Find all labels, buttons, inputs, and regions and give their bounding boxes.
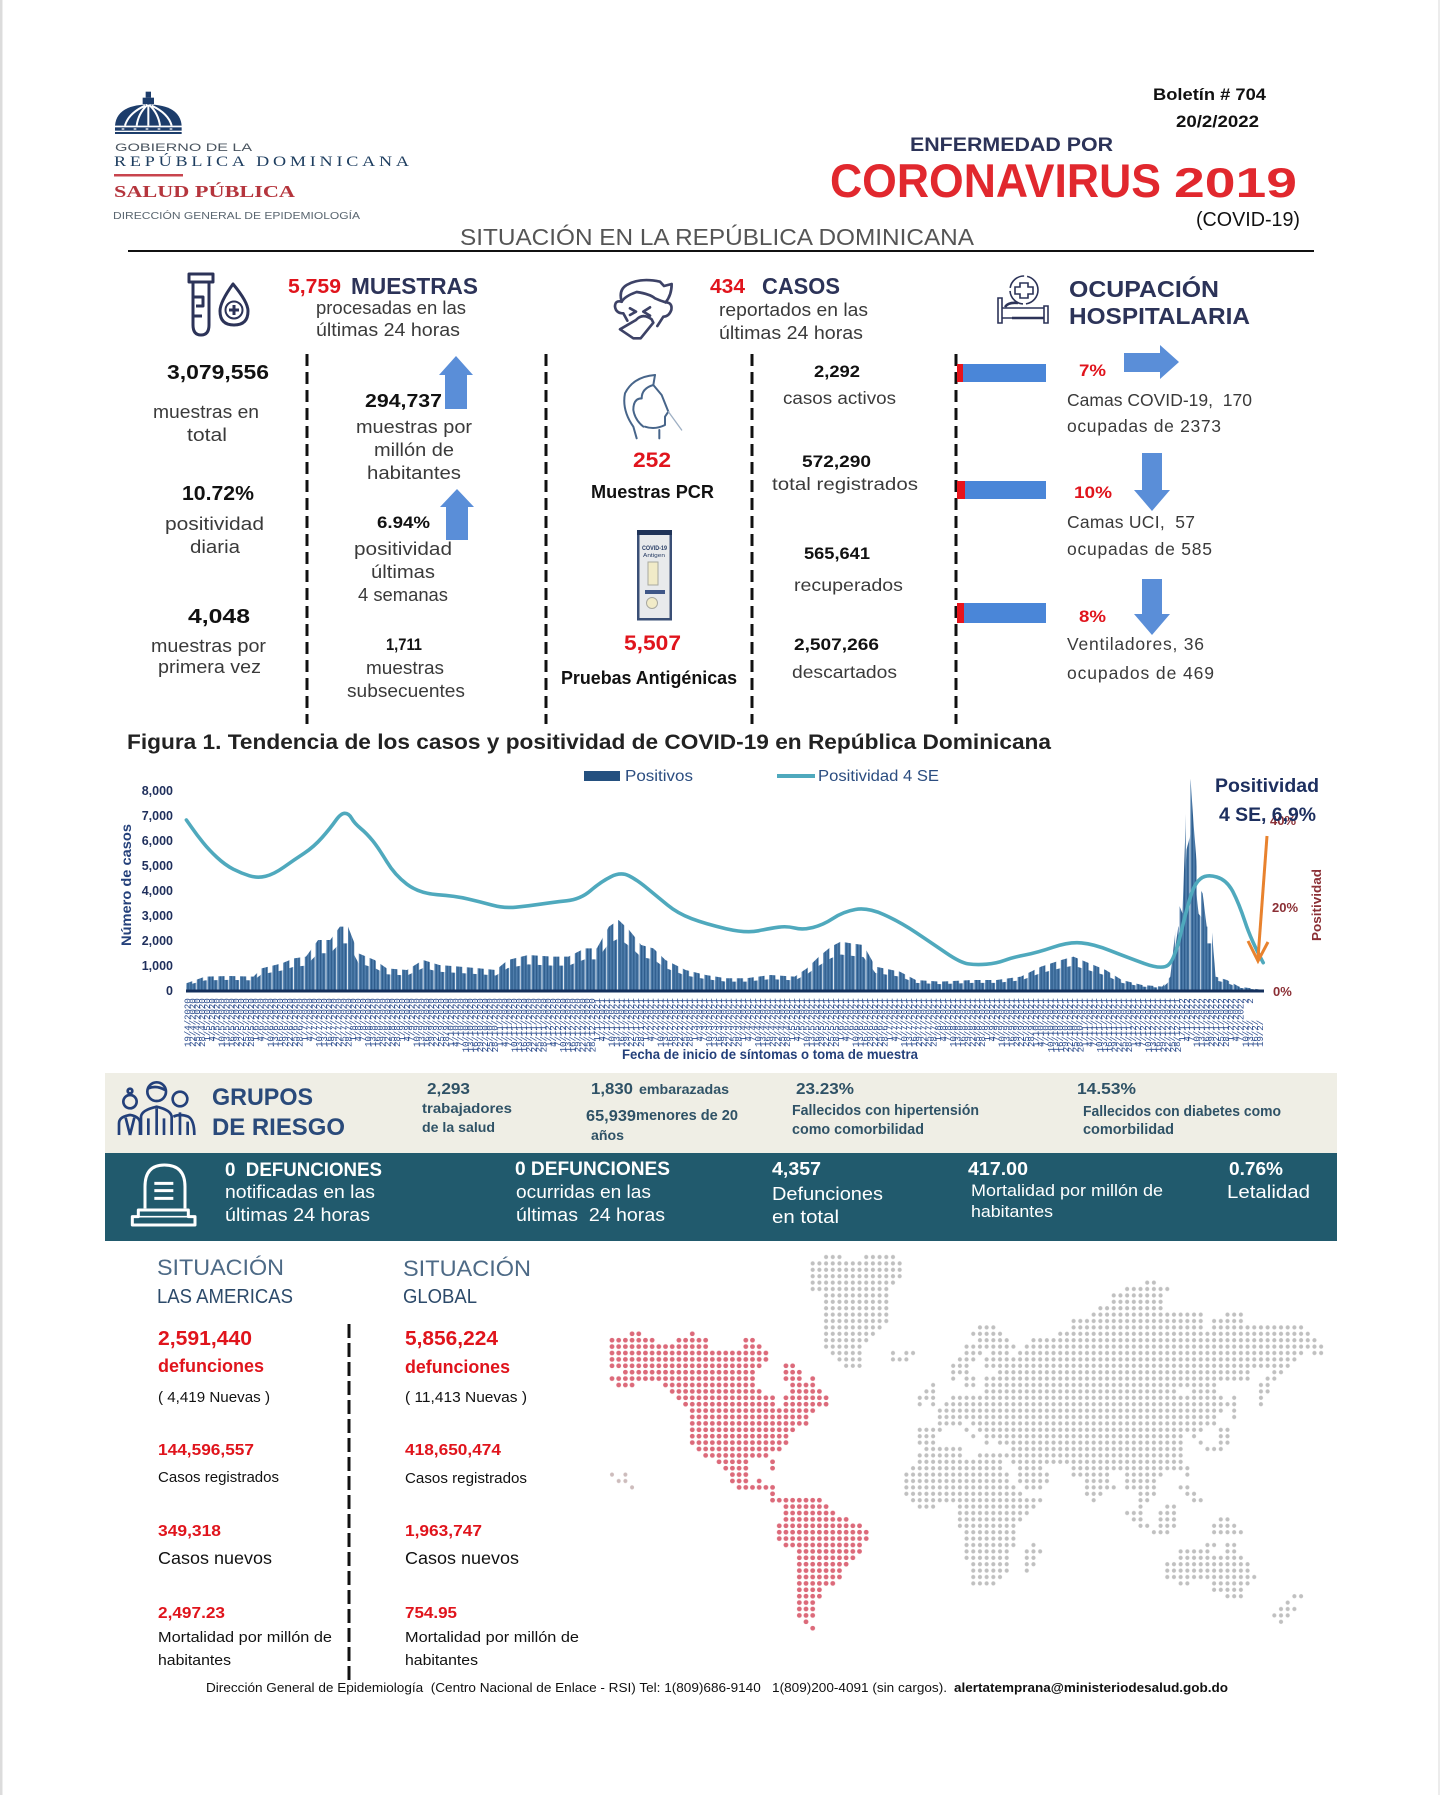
panel: situación global: habitantes: [405, 1652, 478, 1669]
panel: ocupación hospitalaria: 10%: [1074, 483, 1112, 502]
title: [830, 134, 1300, 231]
footer: contact information: alertatemprana@ministeriodesalud.gob.do: [954, 1681, 1228, 1695]
panel: pruebas PCR y antigénicas: 5,507: [624, 632, 681, 655]
panel: grupos de riesgo: años: [591, 1127, 624, 1143]
panel: ocupación hospitalaria header: HOSPITALARIA: [1069, 303, 1250, 329]
panel: situación Las Américas: [157, 1255, 332, 1669]
panel: situación global: SITUACIÓN: [403, 1256, 531, 1281]
panel: situación global: 418,650,474: [405, 1442, 501, 1459]
panel: situación Las Américas: Casos registrados: [158, 1470, 279, 1486]
panel: grupos de riesgo: 14.53%: [1077, 1081, 1136, 1098]
panel: situación Las Américas: 2,497.23: [158, 1605, 225, 1622]
panel: indicadores de muestras: 4 semanas: [358, 585, 448, 605]
panel: casos: 565,641: [804, 545, 870, 563]
heading: figura 1: Figura 1. Tendencia de los casos y positividad de COVID-19 en República Dominicana: [127, 731, 1051, 754]
panel: grupos de riesgo: 2,293: [427, 1081, 470, 1098]
panel: muestras header: últimas 24 horas: [316, 320, 460, 340]
panel: situación Las Américas: 2,591,440: [158, 1328, 252, 1350]
icon: head with swab: [624, 375, 682, 438]
legend: Positividad 4 SE: [818, 768, 939, 785]
panel: pruebas PCR y antigénicas: Pruebas Antigénicas: [561, 668, 737, 688]
panel: ocupación hospitalaria: ocupadas de 585: [1067, 539, 1212, 559]
right axis labels: 20%: [1272, 900, 1298, 915]
x axis dates: 2222222222222222222222222222222222222222222222222222222222222222222222222222222222222222222222222222222222222222222222222222222222222222222222222222222222222222222222222222222222222222222222222222222222222222222222222: [182, 1015, 1246, 1020]
panel: defunciones: 0.76%: [1229, 1159, 1283, 1179]
right axis labels: [1270, 813, 1298, 999]
panel: defunciones: habitantes: [971, 1202, 1053, 1221]
panel: situación Las Américas: LAS AMERICAS: [157, 1286, 293, 1308]
icon: dome: [115, 92, 182, 134]
bars: positivos: [186, 778, 1264, 992]
icon: face with mask: [615, 280, 672, 338]
panel: defunciones: en total: [772, 1206, 839, 1227]
panel: defunciones: notificadas en las: [225, 1182, 375, 1202]
chart: dotted world map with the Americas highlighted: [612, 1257, 1321, 1628]
panel: casos: [772, 363, 918, 682]
panel: situación Las Américas: ( 4,419 Nuevas ): [158, 1390, 270, 1406]
panel: totales de muestras: 10.72%: [182, 483, 254, 505]
right axis labels: 40%: [1270, 813, 1296, 828]
bulletin number and date: 20/2/2022: [1176, 113, 1259, 131]
logo: Gobierno de la República Dominicana, Salud Pública: REPÚBLICA DOMINICANA: [114, 153, 409, 170]
panel: ocupación hospitalaria: ocupados de 469: [1067, 663, 1214, 683]
panel: situación Las Américas: defunciones: [158, 1356, 264, 1376]
bulletin number and date: [1153, 85, 1267, 131]
panel: totales de muestras: [151, 362, 269, 677]
panel: ocupación hospitalaria: 7%: [1079, 361, 1106, 380]
panel: ocupación hospitalaria: ocupadas de 2373: [1067, 416, 1221, 436]
divider between regional and global: [348, 1324, 350, 1680]
left axis labels: 3,000: [142, 909, 173, 923]
bulletin number and date: Boletín # 704: [1153, 85, 1267, 104]
panel: ocupación hospitalaria header: OCUPACIÓN: [1069, 275, 1219, 302]
panel: indicadores de muestras: últimas: [371, 562, 435, 582]
panel: grupos de riesgo: [105, 1073, 1337, 1153]
panel: grupos de riesgo: 1,830: [591, 1081, 633, 1098]
title: (COVID-19): [1196, 209, 1300, 231]
panel: situación global: 1,963,747: [405, 1523, 482, 1540]
panel: situación Las Américas: 144,596,557: [158, 1442, 254, 1459]
panel: totales de muestras: muestras por: [151, 636, 266, 656]
left axis labels: 2,000: [142, 934, 173, 948]
panel: indicadores de muestras: muestras por: [356, 417, 472, 437]
panel: defunciones: Letalidad: [1227, 1181, 1310, 1202]
panel: totales de muestras: muestras en: [153, 402, 259, 422]
panel: situación global: defunciones: [405, 1357, 510, 1377]
panel: situación Las Américas: SITUACIÓN: [157, 1255, 284, 1280]
panel: defunciones: Defunciones: [772, 1183, 883, 1204]
left axis labels: 4,000: [142, 884, 173, 898]
x axis title: Fecha de inicio de síntomas o toma de muestra: [622, 1047, 918, 1062]
panel: casos: total registrados: [772, 474, 918, 494]
left axis labels: 1,000: [142, 959, 173, 973]
panel: indicadores de muestras: subsecuentes: [347, 681, 465, 701]
panel: situación Las Américas: Casos nuevos: [158, 1548, 272, 1568]
x axis dates: 44445555555555666666666677777777778888888888999999999900000000001111111111222222222211111111112222222222333333333344444444445555555555666666666677777777778888888888999999999900000000001111111111222222222211111111112222222: [182, 1025, 1266, 1031]
panel: casos header: CASOS: [762, 273, 840, 299]
panel: situación global: Casos nuevos: [405, 1548, 519, 1568]
panel: defunciones: 0 DEFUNCIONES: [225, 1160, 382, 1181]
panel: indicadores de muestras: [347, 356, 474, 701]
panel: defunciones: Mortalidad por millón de: [971, 1181, 1163, 1200]
right axis labels: 0%: [1273, 984, 1292, 999]
left axis labels: 0: [166, 984, 173, 998]
panel: grupos de riesgo: menores de 20: [636, 1108, 738, 1124]
bar: camas UCI: [957, 481, 1046, 499]
panel: situación global: 5,856,224: [405, 1328, 499, 1350]
panel: indicadores de muestras: millón de: [374, 440, 454, 460]
panel: casos: 2,507,266: [794, 636, 879, 654]
panel: ocupación hospitalaria: Camas COVID-19, 170: [1067, 390, 1252, 410]
left axis labels: [142, 784, 173, 998]
x axis dates: 1112222 1112222 1112222: [1032, 1046, 1184, 1052]
callout: positividad 4 SE 6,9%: Positividad: [1215, 776, 1319, 797]
panel: ocupación hospitalaria: Ventiladores, 36: [1067, 634, 1204, 654]
x axis dates: 0000000000000000000000000000000000000000000000000000000000000000000000000000000000000000000000000000000000000000000000000000000000000000000000000000000000000000000000000000000000000000000000000000000000000000000000000: [182, 1010, 1246, 1015]
panel: indicadores de muestras: 1,711: [386, 636, 422, 654]
panel: situación Las Américas: habitantes: [158, 1652, 231, 1669]
footer: contact information: [206, 1681, 1228, 1695]
x axis dates: 925814703692581470369258147036925814703692581470369258//////////////////////////////147036925814703692581470369258147036925814703692581470369258147036925814703692581470369258//////////////////////////////14703692581470369: [182, 1036, 1266, 1042]
legend: [584, 768, 939, 785]
logo: Gobierno de la República Dominicana, Salud Pública: SALUD PÚBLICA: [114, 182, 296, 201]
panel: grupos de riesgo: 65,939: [586, 1108, 636, 1125]
panel: casos: casos activos: [783, 388, 896, 408]
panel: casos header: reportados en las: [719, 300, 868, 320]
icon: antigen test cassette: [637, 530, 672, 620]
panel: indicadores de muestras: 6.94%: [377, 513, 430, 532]
panel: situación global: 754.95: [405, 1605, 457, 1622]
panel: totales de muestras: primera vez: [158, 657, 261, 677]
footer: contact information: Dirección General de Epidemiología (Centro Nacional de Enlace - RSI) Tel: 1(809)686-9140 1(809)200-4091 (sin cargos).: [206, 1681, 947, 1695]
left axis labels: 5,000: [142, 859, 173, 873]
left axis title: Número de casos: [118, 824, 134, 946]
panel: grupos de riesgo: como comorbilidad: [792, 1122, 924, 1138]
arrow: down, UCI: [1134, 453, 1170, 511]
panel: defunciones: últimas 24 horas: [516, 1205, 665, 1225]
panel: defunciones: [105, 1153, 1337, 1241]
panel: defunciones: 0 DEFUNCIONES: [515, 1159, 670, 1180]
legend: Positivos: [625, 768, 693, 785]
panel: situación Las Américas: Mortalidad por millón de: [158, 1629, 332, 1646]
panel: situación global: ( 11,413 Nuevas ): [405, 1390, 527, 1406]
x axis dates: 1222 1112222 1112222 1112222 1112222 1112222147036925814703692581470369258 1112222 1112222 1112222 1112222 1112222 1112222 1112222 1112222 1112222147036925814703692581470369258 1112222 1111: [182, 1041, 1266, 1047]
panel: defunciones: ocurridas en las: [516, 1182, 651, 1202]
panel: ocupación hospitalaria: 8%: [1079, 607, 1106, 626]
title: ENFERMEDAD POR: [910, 134, 1113, 156]
panel: situación global: [403, 1256, 579, 1669]
panel: grupos de riesgo: trabajadores: [422, 1100, 512, 1116]
arrow: right: [1124, 345, 1179, 379]
panel: totales de muestras: 3,079,556: [167, 362, 269, 384]
panel: muestras header: 5,759: [288, 276, 341, 298]
title: 2019: [1174, 159, 1297, 206]
panel: muestras header: MUESTRAS: [351, 273, 478, 299]
panel: muestras header: [189, 273, 478, 340]
panel: casos: 572,290: [802, 453, 871, 471]
logo: Gobierno de la República Dominicana, Salud Pública: GOBIERNO DE LA: [115, 142, 253, 154]
panel: grupos de riesgo: Fallecidos con hipertensión: [792, 1103, 979, 1119]
x axis dates: [182, 998, 1266, 1052]
left axis labels: 6,000: [142, 834, 173, 848]
panel: casos: recuperados: [794, 575, 903, 595]
icon: test tube and drop: [189, 274, 248, 335]
panel: grupos de riesgo: comorbilidad: [1083, 1122, 1174, 1138]
title: CORONAVIRUS: [830, 154, 1161, 207]
bar: camas COVID-19: [957, 364, 1046, 382]
line: positividad 4 SE: [186, 813, 1263, 967]
panel: totales de muestras: diaria: [190, 537, 241, 557]
panel: grupos de riesgo: 23.23%: [796, 1081, 854, 1098]
icon: antigen test cassette: Antigen: [643, 553, 665, 559]
panel: grupos de riesgo: de la salud: [422, 1119, 495, 1135]
panel: pruebas PCR y antigénicas: [561, 375, 737, 688]
panel: casos header: [615, 273, 868, 343]
panel: casos header: últimas 24 horas: [719, 323, 863, 343]
panel: situación global: GLOBAL: [403, 1286, 477, 1308]
panel: situación global: Mortalidad por millón de: [405, 1629, 579, 1646]
panel: ocupación hospitalaria: [957, 345, 1252, 683]
panel: casos: descartados: [792, 662, 897, 682]
panel: pruebas PCR y antigénicas: 252: [633, 449, 671, 472]
panel: defunciones: 417.00: [968, 1159, 1028, 1179]
x axis dates: 000000000000000000000000000000000000000000000000000000000000000000000000000000000000111111111111111111111111111111111111111111111111111111111111111111111111111111111111111111111111111111111111111111111111222222222222222: [182, 998, 1256, 1004]
x axis dates: 1112222 1112222 1112222: [446, 1046, 598, 1052]
panel: casos: 2,292: [814, 363, 860, 381]
icon: tombstone: [132, 1165, 195, 1225]
arrow: down, ventiladores: [1134, 579, 1170, 635]
callout: positividad 4 SE 6,9%: 4 SE, 6,9%: [1219, 805, 1316, 826]
chart: tendencia de casos y positividad: [118, 768, 1324, 1062]
panel: totales de muestras: 4,048: [188, 606, 250, 628]
bar: ventiladores: [957, 603, 1046, 623]
arrow: orange: [1248, 836, 1268, 961]
callout: positividad 4 SE 6,9%: [1215, 776, 1319, 826]
panel: ocupación hospitalaria header: [998, 275, 1250, 329]
panel: indicadores de muestras: muestras: [366, 658, 444, 678]
right axis title: Positividad: [1310, 869, 1324, 941]
panel: grupos de riesgo: DE RIESGO: [212, 1114, 345, 1141]
panel: grupos de riesgo: embarazadas: [639, 1081, 729, 1097]
x axis dates: 2222222222222222222222222222222222222222222222222222222222222222222222222222222222222222222222222222222222222222222222222222222222222222222222222222222222222222222222222222222222222222222222222222222222222222222222222: [182, 1004, 1246, 1009]
column dividers: [307, 354, 956, 724]
left axis labels: 8,000: [142, 784, 173, 798]
panel: casos header: 434: [710, 276, 746, 298]
icon: group of people: [119, 1082, 194, 1135]
panel: totales de muestras: positividad: [165, 514, 264, 534]
section heading: situación en la República Dominicana: SITUACIÓN EN LA REPÚBLICA DOMINICANA: [460, 224, 975, 250]
panel: ocupación hospitalaria: Camas UCI, 57: [1067, 512, 1195, 532]
panel: indicadores de muestras: 294,737: [365, 391, 442, 411]
logo: Gobierno de la República Dominicana, Salud Pública: [113, 92, 409, 222]
panel: grupos de riesgo: GRUPOS: [212, 1084, 313, 1111]
panel: situación global: Casos registrados: [405, 1471, 527, 1487]
arrow: up, muestras por millón: [439, 356, 473, 409]
icon: antigen test cassette: COVID-19: [642, 546, 668, 552]
arrow: up, positividad: [440, 489, 474, 540]
panel: defunciones: 4,357: [772, 1159, 821, 1179]
panel: situación Las Américas: 349,318: [158, 1523, 221, 1540]
x axis dates: /////////////////////////////////////////////////////////////////////////////////////////////////////////////////////////////////////////////////////////////////////////////////////////////////////////////////////////////: [182, 1020, 1266, 1025]
x axis dates: //////////////////////////////////////////////////////111111111111111111111111111111//////////////////////////////////////////////////////////////////////////////////////////111111111111111111111111111111/////////////////: [182, 1030, 1266, 1036]
left axis labels: 7,000: [142, 809, 173, 823]
panel: grupos de riesgo: Fallecidos con diabetes como: [1083, 1104, 1281, 1120]
panel: indicadores de muestras: habitantes: [367, 463, 461, 483]
icon: hospital bed: [998, 276, 1048, 323]
panel: totales de muestras: total: [187, 425, 227, 445]
panel: muestras header: procesadas en las: [316, 298, 466, 318]
panel: pruebas PCR y antigénicas: Muestras PCR: [591, 482, 714, 502]
panel: indicadores de muestras: positividad: [354, 539, 452, 559]
panel: defunciones: últimas 24 horas: [225, 1205, 370, 1225]
logo: Gobierno de la República Dominicana, Salud Pública: DIRECCIÓN GENERAL DE EPIDEMIOLOGÍA: [113, 209, 360, 222]
